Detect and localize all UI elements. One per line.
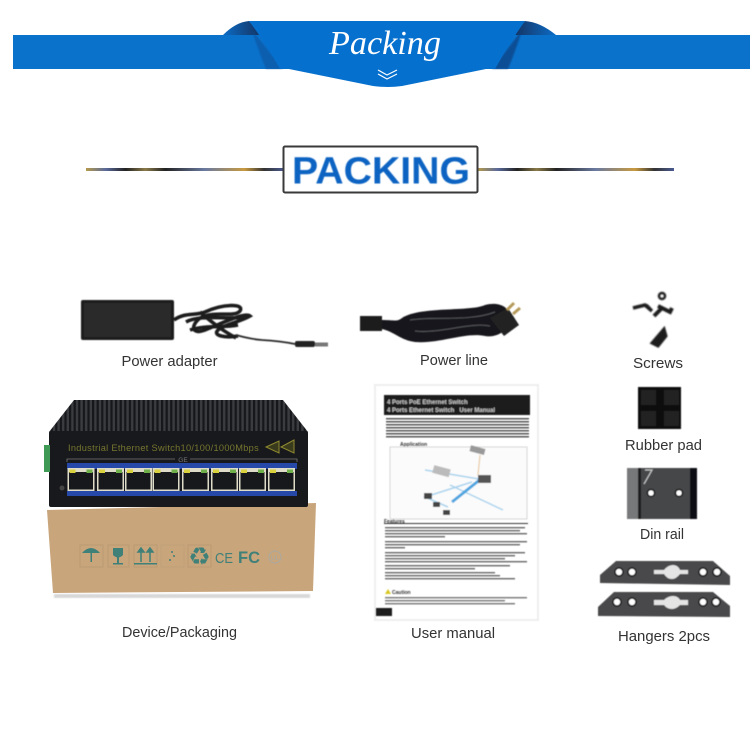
ethernet switch xyxy=(44,400,308,507)
application diagram xyxy=(390,447,527,519)
box icons: FC xyxy=(238,548,260,567)
manual contents: Application xyxy=(400,442,427,448)
item: rubber pad xyxy=(625,387,702,454)
manual contents: 4 Ports Ethernet Switch User Manual xyxy=(387,408,495,414)
power line photo xyxy=(360,303,520,342)
manual contents: 4 Ports PoE Ethernet Switch xyxy=(387,400,468,406)
manual contents xyxy=(376,395,530,616)
item: din rail xyxy=(627,468,697,543)
rubber pad photo xyxy=(638,387,681,429)
ethernet ports xyxy=(68,468,295,491)
ribbon shadows xyxy=(252,30,283,69)
hanger top xyxy=(600,561,730,585)
hangers label: Hangers 2pcs xyxy=(618,629,710,645)
switch model text: Industrial Ethernet Switch10/100/1000Mbps xyxy=(68,443,259,453)
features heading xyxy=(384,523,528,524)
item: power line xyxy=(360,303,520,369)
hanger bottom xyxy=(598,592,730,617)
manual contents: Caution xyxy=(392,590,411,596)
ribbon centre tab xyxy=(249,21,525,87)
screws label: Screws xyxy=(633,356,683,372)
manual label: User manual xyxy=(411,626,495,642)
device label: Device/Packaging xyxy=(122,625,237,641)
manual header xyxy=(384,395,530,415)
top ribbon banner xyxy=(13,21,750,87)
item: screws xyxy=(633,293,683,372)
switch top fins xyxy=(49,400,308,432)
switch front xyxy=(49,431,308,507)
cardboard box xyxy=(47,503,316,598)
heading rule left xyxy=(86,168,284,171)
terminal connector xyxy=(44,445,50,472)
blue upper strip xyxy=(67,463,297,469)
box icons: UL xyxy=(271,555,280,562)
intro text xyxy=(386,418,529,438)
page number tab xyxy=(376,608,392,616)
ribbon band xyxy=(13,35,750,69)
heading text: PACKING xyxy=(292,150,470,192)
certification marks: CE xyxy=(215,550,233,567)
section heading xyxy=(86,146,674,192)
heading rule right xyxy=(478,168,674,171)
manual page xyxy=(375,385,538,620)
GE rule xyxy=(67,459,297,462)
heading box xyxy=(284,146,478,192)
item: power adapter xyxy=(81,300,328,370)
banner title: Packing xyxy=(328,25,441,62)
warning triangles xyxy=(266,440,294,453)
power led xyxy=(60,486,64,490)
GE label: GE xyxy=(178,457,188,464)
manual contents: Features xyxy=(384,519,405,525)
box icons xyxy=(80,542,281,571)
adapter label: Power adapter xyxy=(122,354,218,370)
ribbon fold right xyxy=(512,21,556,35)
blue lower strip xyxy=(67,491,297,496)
item: hangers xyxy=(598,561,730,645)
features text xyxy=(385,527,527,579)
screws photo xyxy=(633,293,672,346)
din rail label: Din rail xyxy=(640,527,684,543)
icon: double chevron xyxy=(378,70,397,79)
item: user manual xyxy=(375,385,538,642)
item: device and packaging xyxy=(44,400,316,641)
din rail photo xyxy=(627,468,697,519)
ribbon fold left xyxy=(223,21,262,35)
power line label: Power line xyxy=(420,353,488,369)
caution text xyxy=(385,589,391,594)
rubber pad label: Rubber pad xyxy=(625,438,702,454)
adapter photo xyxy=(81,300,328,347)
recycling mark: ♻ xyxy=(188,542,211,571)
